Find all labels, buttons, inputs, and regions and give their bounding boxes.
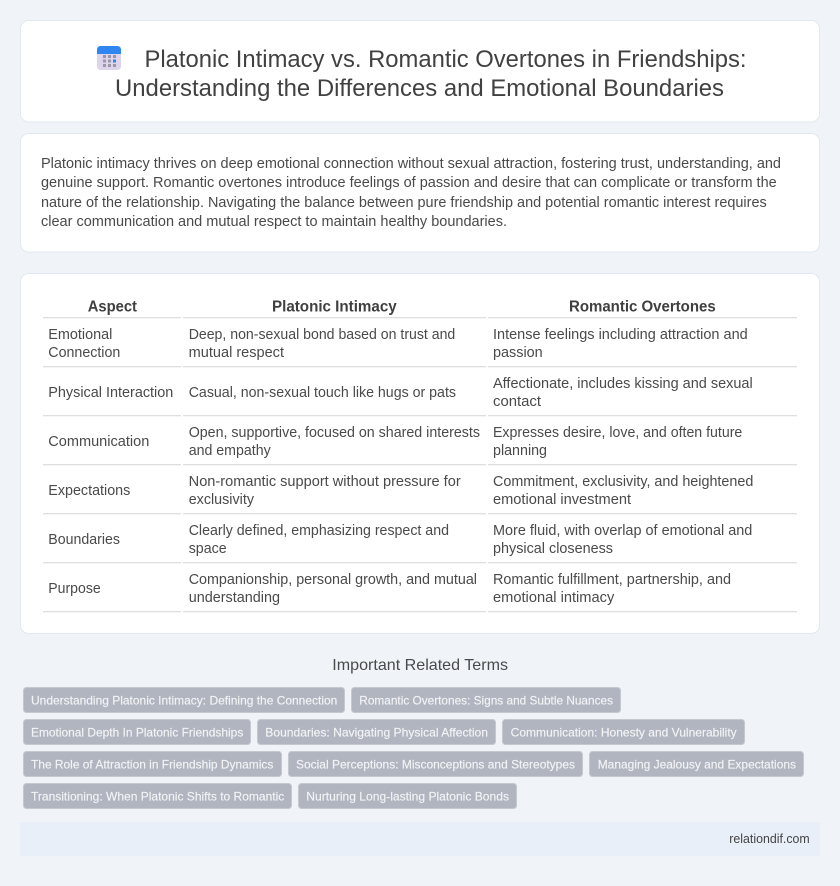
- row: communication: and empathy: [189, 443, 271, 459]
- row: communication: [48, 425, 742, 459]
- row: emotional connection: Connection: [48, 345, 120, 361]
- row: physical interaction: Affectionate, includes kissing and sexual: [493, 376, 753, 392]
- row: expectations: emotional investment: [493, 492, 631, 508]
- table header row: Aspect: [88, 298, 137, 316]
- tag: Romantic Overtones: Signs and Subtle Nuances: [359, 693, 613, 707]
- tag: Transitioning: When Platonic Shifts to Romantic: [31, 789, 284, 803]
- panel: intro paragraph: nature of the relationship. Navigating the balance between pure friendship and potential romantic interest requires: [41, 195, 767, 211]
- tag: [258, 720, 496, 744]
- row: expectations: exclusivity: [189, 492, 255, 508]
- row: purpose: understanding: [189, 590, 280, 606]
- row: purpose: emotional intimacy: [493, 590, 615, 606]
- row: physical interaction: Physical Interaction: [48, 385, 173, 401]
- panel: title header: [20, 20, 820, 122]
- row: expectations: Commitment, exclusivity, and heightened: [493, 474, 753, 490]
- title: Understanding the Differences and Emotional Boundaries: [115, 75, 724, 102]
- panel: intro paragraph: genuine support. Romantic overtones introduce feelings of passion and desire that can complicate or transform the: [41, 175, 777, 191]
- panel: related term tags: [24, 688, 804, 808]
- tag: [24, 688, 344, 712]
- row: expectations: Non-romantic support without pressure for: [189, 474, 461, 490]
- row: boundaries: Clearly defined, emphasizing respect and: [189, 523, 449, 539]
- row: purpose: Companionship, personal growth, and mutual: [189, 572, 477, 588]
- row: physical interaction: [48, 376, 753, 410]
- tag: [298, 784, 516, 808]
- tag: [24, 752, 282, 776]
- tag: [352, 688, 620, 712]
- row: communication: Expresses desire, love, and often future: [493, 425, 742, 441]
- row: emotional connection: Emotional: [48, 327, 112, 343]
- row: boundaries: More fluid, with overlap of emotional and: [493, 523, 752, 539]
- tag: [288, 752, 582, 776]
- panel: comparison table: [20, 274, 820, 634]
- title: [115, 46, 746, 102]
- row: emotional connection: Intense feelings including attraction and: [493, 327, 748, 343]
- tag: [502, 720, 744, 744]
- panel: intro paragraph: [20, 134, 820, 252]
- row: purpose: Romantic fulfillment, partnership, and: [493, 572, 731, 588]
- footer bar: [20, 822, 820, 856]
- icon: calendar: [97, 46, 121, 70]
- tag: Communication: Honesty and Vulnerability: [511, 725, 737, 739]
- tag: [24, 720, 250, 744]
- row: purpose: [48, 572, 731, 606]
- panel: intro paragraph: Platonic intimacy thrives on deep emotional connection without sexual attraction, fostering trust, understanding, and: [41, 156, 781, 172]
- row: emotional connection: Deep, non-sexual bond based on trust and: [189, 327, 455, 343]
- tag: Understanding Platonic Intimacy: Defining the Connection: [31, 693, 337, 707]
- row: purpose: Purpose: [48, 581, 101, 597]
- heading: important related terms: Important Related Terms: [332, 657, 508, 674]
- tag: [590, 752, 804, 776]
- row: boundaries: [48, 523, 752, 557]
- row: communication: Communication: [48, 434, 149, 450]
- tag: Nurturing Long-lasting Platonic Bonds: [306, 789, 509, 803]
- tag: The Role of Attraction in Friendship Dynamics: [31, 757, 273, 771]
- table header row: [88, 298, 716, 316]
- row: expectations: [48, 474, 753, 508]
- tag: [24, 784, 292, 808]
- row: communication: Open, supportive, focused on shared interests: [189, 425, 480, 441]
- row: boundaries: physical closeness: [493, 541, 613, 557]
- tag: Social Perceptions: Misconceptions and Stereotypes: [296, 757, 575, 771]
- row: emotional connection: [48, 327, 748, 361]
- row: boundaries: space: [189, 541, 227, 557]
- table header row: Platonic Intimacy: [272, 298, 397, 316]
- row: communication: planning: [493, 443, 547, 459]
- row: emotional connection: mutual respect: [189, 345, 284, 361]
- footer bar: relationdif.com: [729, 831, 810, 846]
- row: boundaries: Boundaries: [48, 532, 120, 548]
- tag: Emotional Depth In Platonic Friendships: [31, 725, 243, 739]
- panel: intro paragraph: clear communication and mutual respect to maintain healthy boundaries.: [41, 214, 507, 230]
- row: emotional connection: passion: [493, 345, 543, 361]
- row: expectations: Expectations: [48, 483, 130, 499]
- tag: Boundaries: Navigating Physical Affection: [265, 725, 488, 739]
- row: physical interaction: contact: [493, 394, 541, 410]
- title: Platonic Intimacy vs. Romantic Overtones in Friendships:: [144, 46, 746, 73]
- tag: Managing Jealousy and Expectations: [598, 757, 796, 771]
- table header row: Romantic Overtones: [569, 298, 716, 316]
- row: physical interaction: Casual, non-sexual touch like hugs or pats: [189, 385, 456, 401]
